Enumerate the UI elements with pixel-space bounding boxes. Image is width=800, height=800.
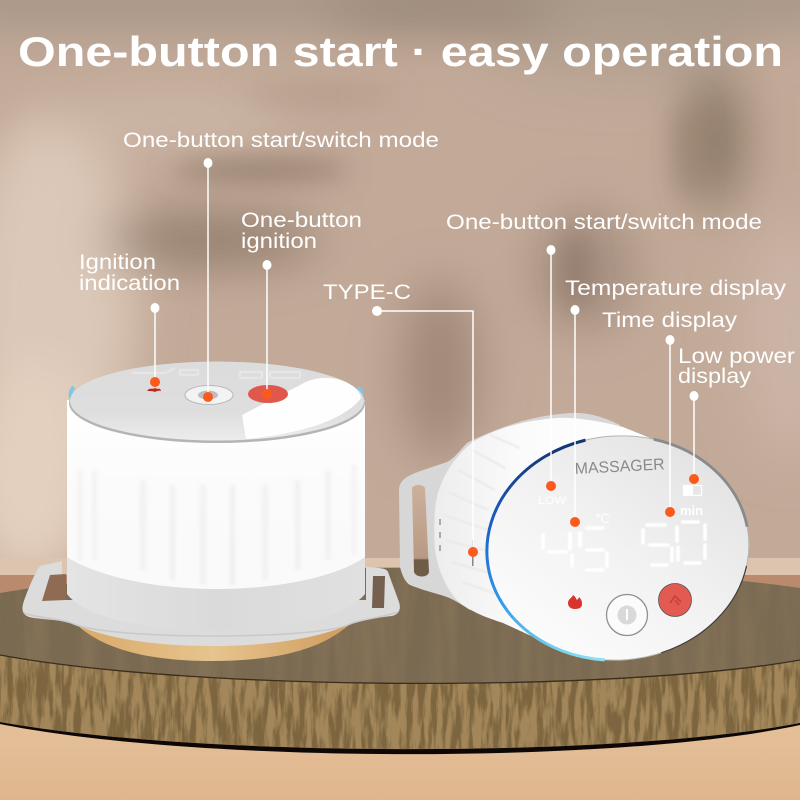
callout: temperature display	[565, 276, 786, 527]
MASSAGER label: MASSAGER	[574, 456, 665, 478]
disc highlight	[242, 378, 361, 439]
faint digits	[132, 368, 300, 378]
callout: time display	[602, 308, 737, 517]
strap slot	[412, 485, 429, 576]
flame icon	[568, 595, 582, 609]
min label: min	[680, 503, 703, 518]
callout: ignition indication: indication	[79, 271, 180, 295]
callout: temperature display: Temperature display	[565, 276, 786, 300]
silicone strap	[399, 413, 620, 610]
callout: one-button ignition	[241, 208, 362, 399]
usb port	[439, 519, 474, 566]
floor below table	[0, 700, 800, 800]
battery icon	[684, 486, 702, 496]
display disc	[477, 425, 758, 671]
callout: TYPE-C: TYPE-C	[323, 280, 411, 304]
cylinder body	[434, 418, 680, 657]
left device	[22, 362, 400, 661]
callout: one-button start right: One-button start/switch mode	[446, 210, 762, 234]
white cylinder body	[67, 400, 365, 589]
time digits	[643, 522, 705, 565]
flame indicator icon	[147, 388, 161, 392]
title: One-button start · easy operation	[18, 28, 783, 75]
body ribs	[78, 465, 356, 585]
start button	[185, 386, 233, 404]
callout: one-button start right	[446, 210, 762, 491]
power button	[606, 594, 648, 636]
callout: one-button start left	[123, 128, 439, 402]
blue light ring	[478, 440, 605, 669]
grey silicone band	[67, 550, 365, 631]
callout: one-button ignition: One-button	[241, 208, 362, 232]
table side	[0, 656, 800, 750]
bottom right dark edge	[654, 566, 753, 653]
callout: one-button start left: One-button start/switch mode	[123, 128, 439, 152]
wooden base	[72, 620, 354, 661]
ignition button	[248, 385, 288, 403]
temperature digits	[543, 528, 607, 570]
degree label: ℃	[595, 511, 610, 526]
callout: TYPE-C	[323, 280, 478, 557]
callout: ignition indication: Ignition	[79, 250, 156, 274]
table top	[0, 568, 800, 684]
top right grey rim	[654, 432, 747, 534]
callout: low power display	[678, 344, 795, 484]
background horizon band	[0, 558, 800, 615]
ignition button	[658, 584, 692, 616]
silicone strap	[22, 561, 400, 646]
LOW indicator: LOW	[538, 495, 567, 507]
callout: time display: Time display	[602, 308, 737, 332]
body ribs	[443, 435, 520, 596]
strap slot right	[372, 576, 385, 608]
strap shading	[24, 612, 398, 636]
wooden table	[0, 568, 800, 754]
callout: low power display: display	[678, 364, 751, 388]
callout: one-button ignition: ignition	[241, 229, 317, 253]
top disc	[69, 363, 365, 443]
callout: low power display: Low power	[678, 344, 795, 368]
callout: ignition indication	[79, 250, 180, 387]
blue rim	[71, 387, 361, 401]
right device	[399, 413, 758, 671]
strap slot left	[42, 574, 66, 601]
table shadow	[0, 718, 800, 754]
